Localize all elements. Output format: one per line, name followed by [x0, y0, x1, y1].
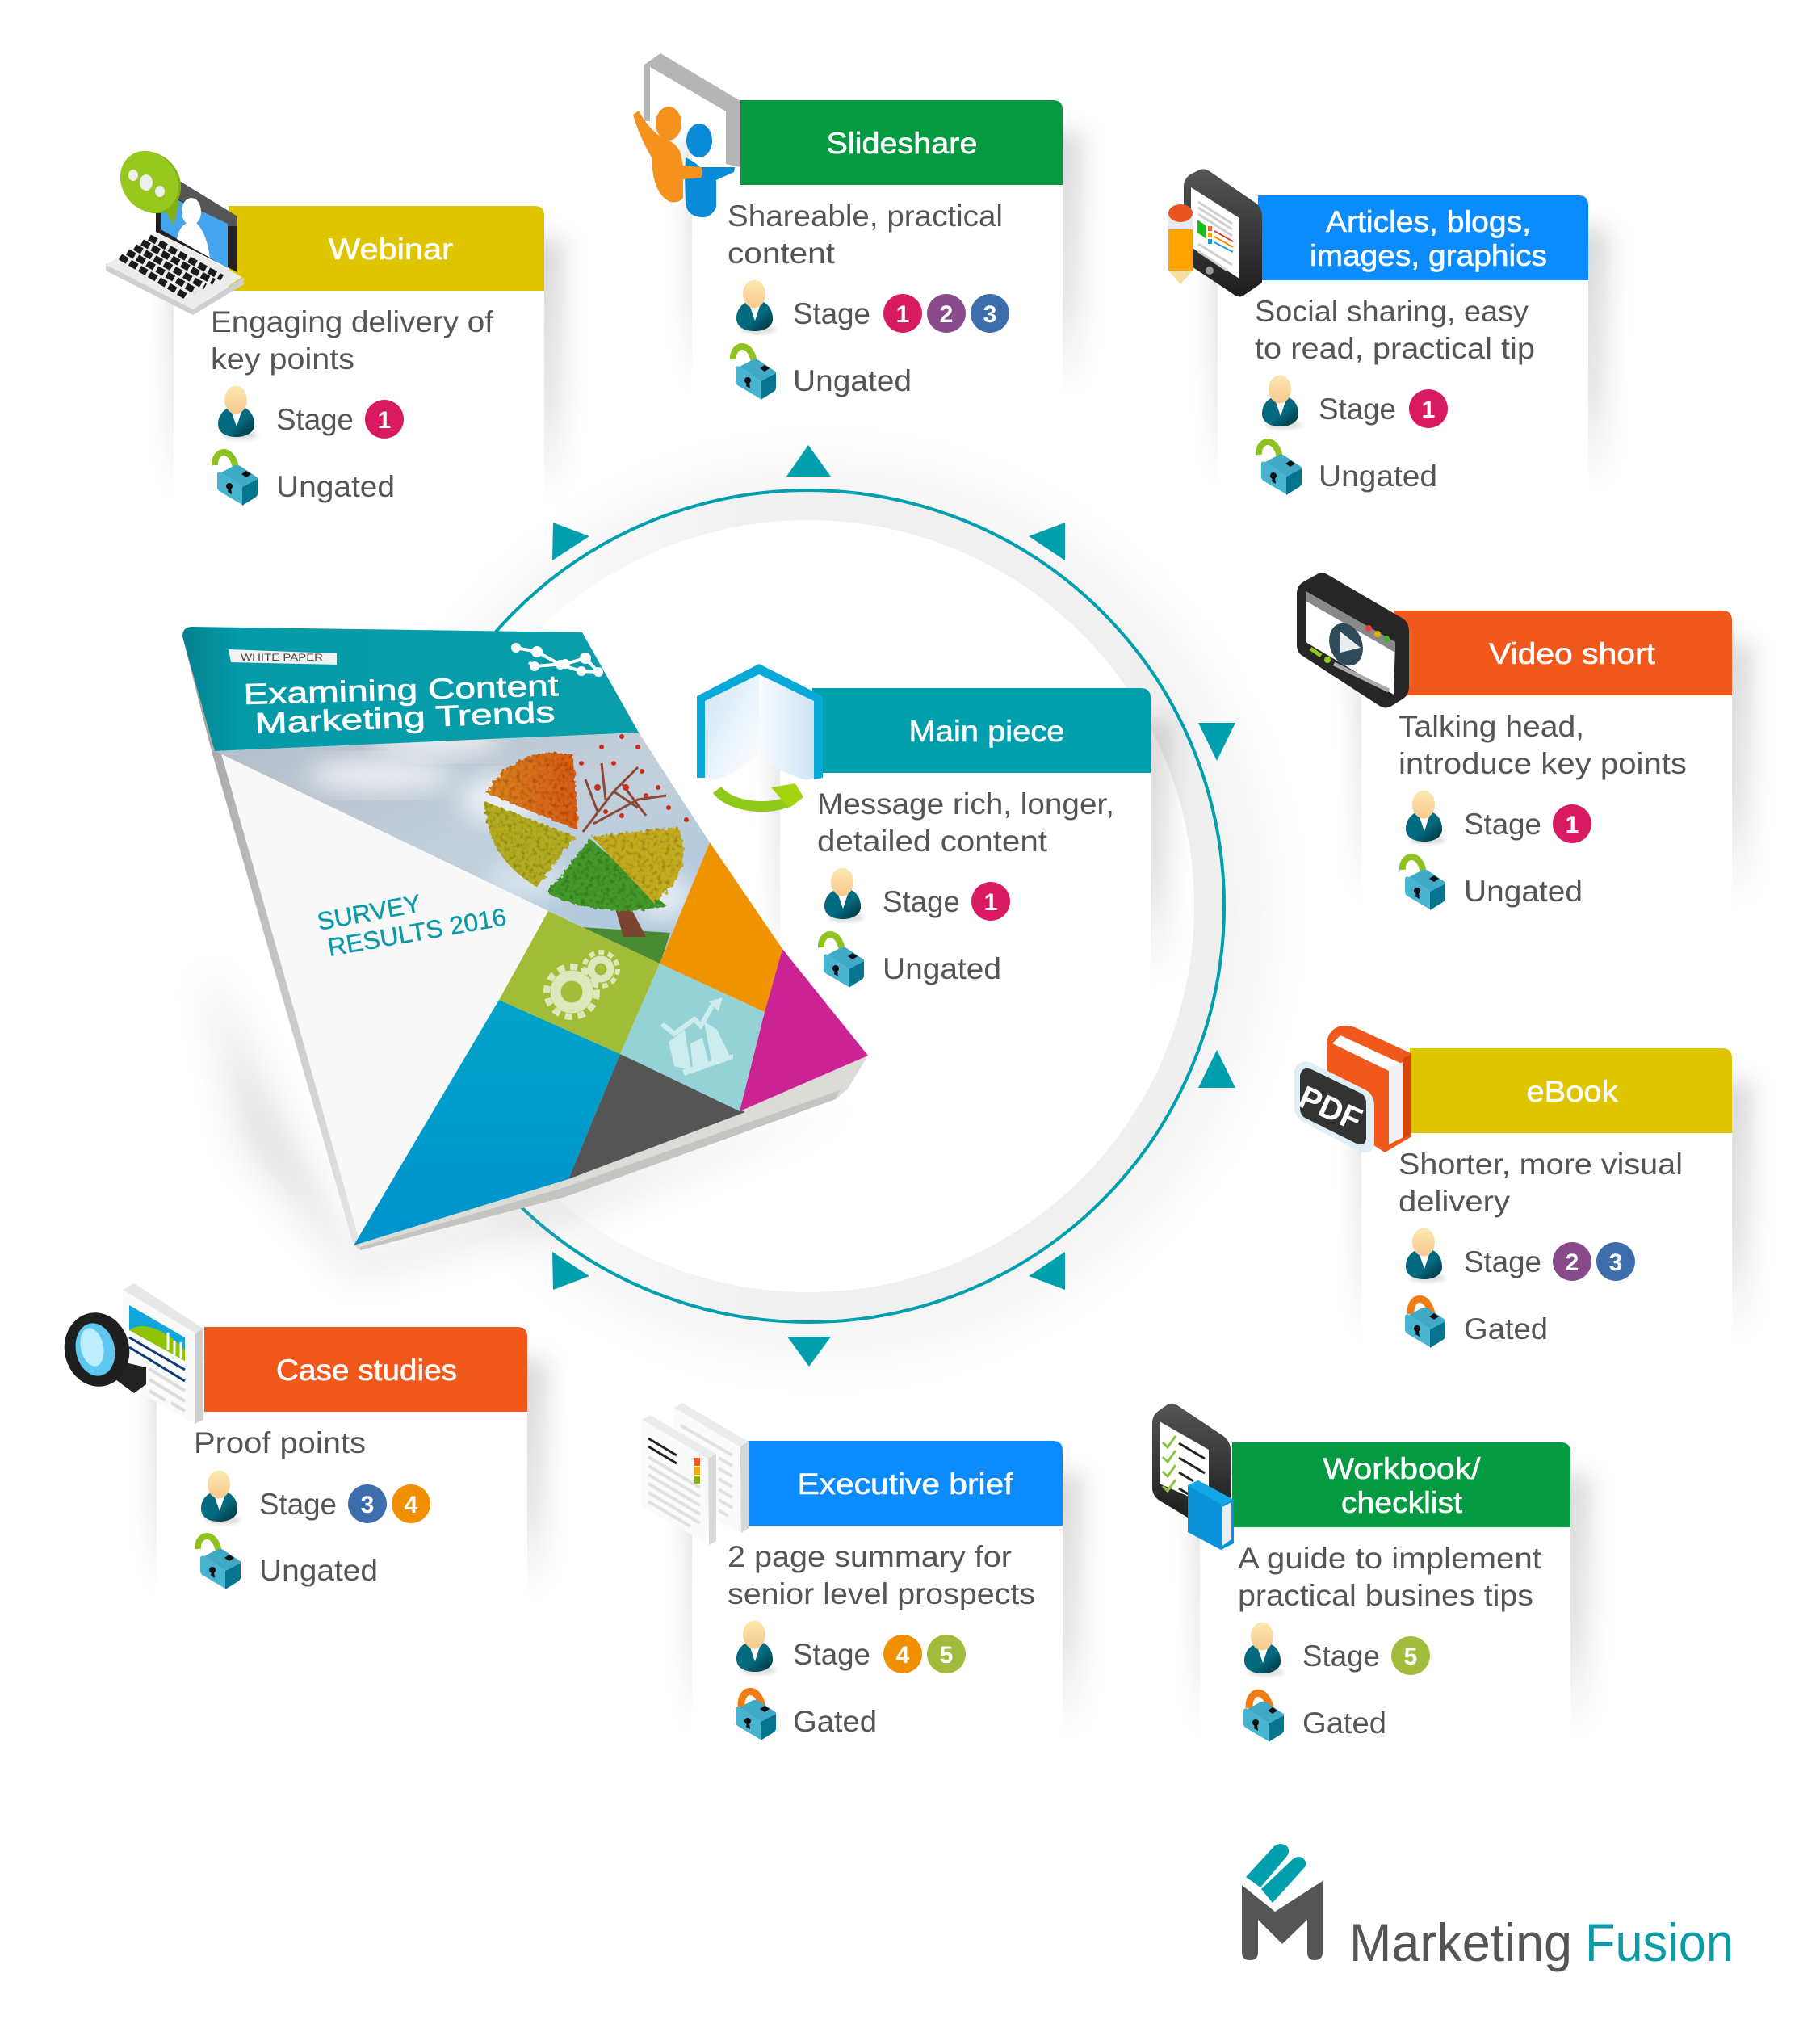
falling leaves — [579, 734, 689, 822]
teal title band — [182, 627, 639, 751]
stage row — [1262, 375, 1448, 429]
description: Social sharing, easy — [1255, 295, 1529, 328]
header: articles: images, graphics — [1310, 239, 1547, 272]
stage row: 1 — [1422, 397, 1435, 423]
arrow: upper left — [552, 523, 589, 560]
tree trunk — [615, 909, 646, 937]
stage row — [736, 1620, 966, 1674]
description: Message rich, longer, — [817, 787, 1114, 821]
panel: workbook — [1195, 1442, 1591, 1749]
icon: tablet with pencil — [1168, 169, 1262, 297]
tree branches — [583, 763, 666, 832]
access row — [1405, 1299, 1548, 1348]
description — [817, 787, 1114, 858]
arrow: upper right — [1029, 523, 1065, 560]
description: Shorter, more visual — [1399, 1148, 1683, 1181]
description: practical busines tips — [1238, 1579, 1533, 1612]
access row: Ungated — [883, 952, 1001, 985]
header: executive brief — [740, 1441, 1063, 1526]
description — [1238, 1542, 1542, 1612]
description: delivery — [1399, 1185, 1511, 1218]
stage row: 2 — [940, 301, 953, 328]
access row — [733, 346, 912, 400]
description: 2 page summary for — [728, 1540, 1012, 1573]
stage row: 1 — [984, 889, 997, 916]
white cover panel — [215, 751, 548, 1245]
access row — [198, 1536, 378, 1589]
stage row: 3 — [983, 301, 996, 328]
cover title — [243, 669, 559, 740]
panel: video short — [1357, 611, 1752, 917]
survey results label: RESULTS 2016 — [325, 903, 509, 962]
description — [1255, 295, 1535, 365]
access row: Ungated — [1319, 460, 1437, 493]
arrow: lower left — [552, 1252, 589, 1290]
stage row — [201, 1470, 430, 1524]
stage row: 5 — [940, 1642, 953, 1669]
description: to read, practical tip — [1255, 332, 1535, 365]
icon: video player — [1297, 573, 1409, 707]
header: articles — [1258, 195, 1588, 280]
access row — [1259, 442, 1437, 495]
header: video short: Video short — [1489, 637, 1656, 670]
network logo — [513, 644, 602, 675]
panel: ebook — [1357, 1048, 1752, 1355]
stage row: Stage — [259, 1488, 337, 1521]
description — [1399, 1148, 1683, 1218]
stage row: 2 — [1566, 1249, 1579, 1276]
panel: case studies — [152, 1327, 547, 1610]
access row: Gated — [1302, 1707, 1386, 1740]
description: detailed content — [817, 825, 1048, 858]
white paper cover — [182, 627, 868, 1276]
stage row: Stage — [1302, 1639, 1380, 1673]
header: main piece — [812, 688, 1151, 773]
header: webinar: Webinar — [329, 233, 453, 266]
stage row: Stage — [883, 885, 960, 918]
header: workbook: checklist — [1341, 1486, 1463, 1519]
arrow: right upper — [1198, 723, 1235, 761]
header: executive brief: Executive brief — [798, 1467, 1013, 1501]
access row — [1243, 1693, 1386, 1742]
cover title: Examining Content — [243, 669, 559, 711]
logo wordmark: Marketing — [1349, 1912, 1572, 1972]
stage row — [824, 867, 1010, 922]
header: case studies — [204, 1327, 527, 1412]
magenta panel — [740, 949, 868, 1111]
description — [728, 1540, 1035, 1610]
description: Proof points — [194, 1426, 366, 1459]
arrow: bottom — [787, 1337, 831, 1367]
pie tree foliage — [484, 753, 684, 910]
panel: main piece — [775, 688, 1171, 995]
description: A guide to implement — [1238, 1542, 1542, 1575]
orange panel — [660, 842, 782, 1012]
dark grey panel — [568, 1054, 745, 1179]
header: ebook: eBook — [1526, 1075, 1618, 1108]
stage row — [1406, 1228, 1635, 1282]
icon: open book with arrow — [697, 664, 823, 808]
icon: pdf book: PDF — [1294, 1080, 1367, 1138]
panel: slideshare — [687, 100, 1083, 407]
icon: laptop with speech bubble — [106, 140, 244, 315]
description: Shareable, practical — [728, 199, 1003, 233]
logo: marketing fusion: Fusion — [1585, 1912, 1734, 1972]
description: key points — [211, 342, 354, 376]
cover shadow — [206, 969, 848, 1276]
header: main piece: Main piece — [909, 715, 1064, 748]
header: case studies: Case studies — [276, 1354, 457, 1387]
stage row: Stage — [276, 403, 354, 436]
header: ebook — [1410, 1048, 1732, 1133]
spine edge — [182, 636, 359, 1245]
header: video short — [1394, 611, 1732, 695]
access row: Ungated — [276, 470, 395, 503]
cycle ring with arrows — [382, 445, 1265, 1367]
green panel — [499, 911, 660, 1054]
icon: presentation board with two people — [633, 53, 740, 217]
logo mark — [1242, 1844, 1323, 1960]
stage row: 5 — [1404, 1644, 1417, 1670]
description: Talking head, — [1399, 710, 1584, 743]
header: articles: Articles, blogs, — [1326, 205, 1531, 238]
page block — [354, 1056, 868, 1250]
access row — [821, 934, 1001, 988]
access row — [215, 452, 395, 506]
tree grass — [581, 927, 670, 965]
survey results label: SURVEY — [315, 889, 423, 936]
stage row: Stage — [793, 297, 870, 330]
icon: pdf book — [1294, 1026, 1411, 1153]
icon: checklist tablet with book — [1152, 1404, 1234, 1550]
access row — [1403, 857, 1583, 910]
header: slideshare: Slideshare — [827, 127, 977, 160]
white paper tag: WHITE PAPER — [241, 652, 323, 663]
header: webinar — [229, 206, 544, 291]
access row: Ungated — [1464, 875, 1583, 908]
white paper tag — [229, 649, 337, 665]
icon: gears — [547, 952, 618, 1017]
description: introduce key points — [1399, 747, 1687, 780]
arrow: right lower — [1198, 1050, 1235, 1088]
stage row: 1 — [896, 301, 909, 328]
stage row: Stage — [793, 1638, 870, 1671]
light teal panel — [620, 964, 765, 1111]
access row: Ungated — [259, 1554, 378, 1587]
stage row: Stage — [1319, 393, 1396, 426]
panel: articles — [1213, 195, 1608, 502]
access row: Gated — [1464, 1312, 1548, 1346]
stage row — [1406, 790, 1591, 844]
icon: growth chart — [662, 997, 733, 1076]
description — [728, 199, 1003, 270]
description — [211, 305, 494, 376]
header: slideshare — [740, 100, 1063, 185]
stage row — [736, 279, 1009, 334]
panel: webinar — [169, 206, 564, 513]
description: senior level prospects — [728, 1577, 1035, 1610]
cover title: Marketing Trends — [254, 695, 556, 740]
panel: executive brief — [687, 1441, 1083, 1748]
stage row: 4 — [896, 1642, 910, 1669]
stage row: 3 — [361, 1492, 374, 1518]
stage row: 4 — [405, 1492, 418, 1518]
access row: Gated — [793, 1705, 877, 1738]
logo: marketing fusion — [1242, 1844, 1734, 1972]
description: content — [728, 237, 836, 270]
access row — [736, 1691, 877, 1740]
access row: Ungated — [793, 364, 912, 397]
description: Engaging delivery of — [211, 305, 494, 338]
arrow: lower right — [1029, 1252, 1065, 1290]
icon: document with magnifier — [57, 1283, 203, 1424]
blue panel — [354, 1000, 620, 1245]
stage row: Stage — [1464, 1245, 1541, 1278]
stage row — [218, 386, 404, 439]
stage row: Stage — [1464, 808, 1541, 841]
stage row: 1 — [1566, 812, 1579, 838]
header: workbook: Workbook/ — [1323, 1452, 1481, 1485]
icon: stacked documents — [642, 1403, 749, 1545]
photo: sky and tree — [215, 721, 710, 965]
stage row: 3 — [1609, 1249, 1622, 1276]
stage row: 1 — [378, 407, 391, 434]
header: workbook — [1232, 1442, 1570, 1527]
stage row — [1244, 1622, 1430, 1676]
description — [1399, 710, 1687, 780]
arrow: top — [786, 445, 831, 477]
